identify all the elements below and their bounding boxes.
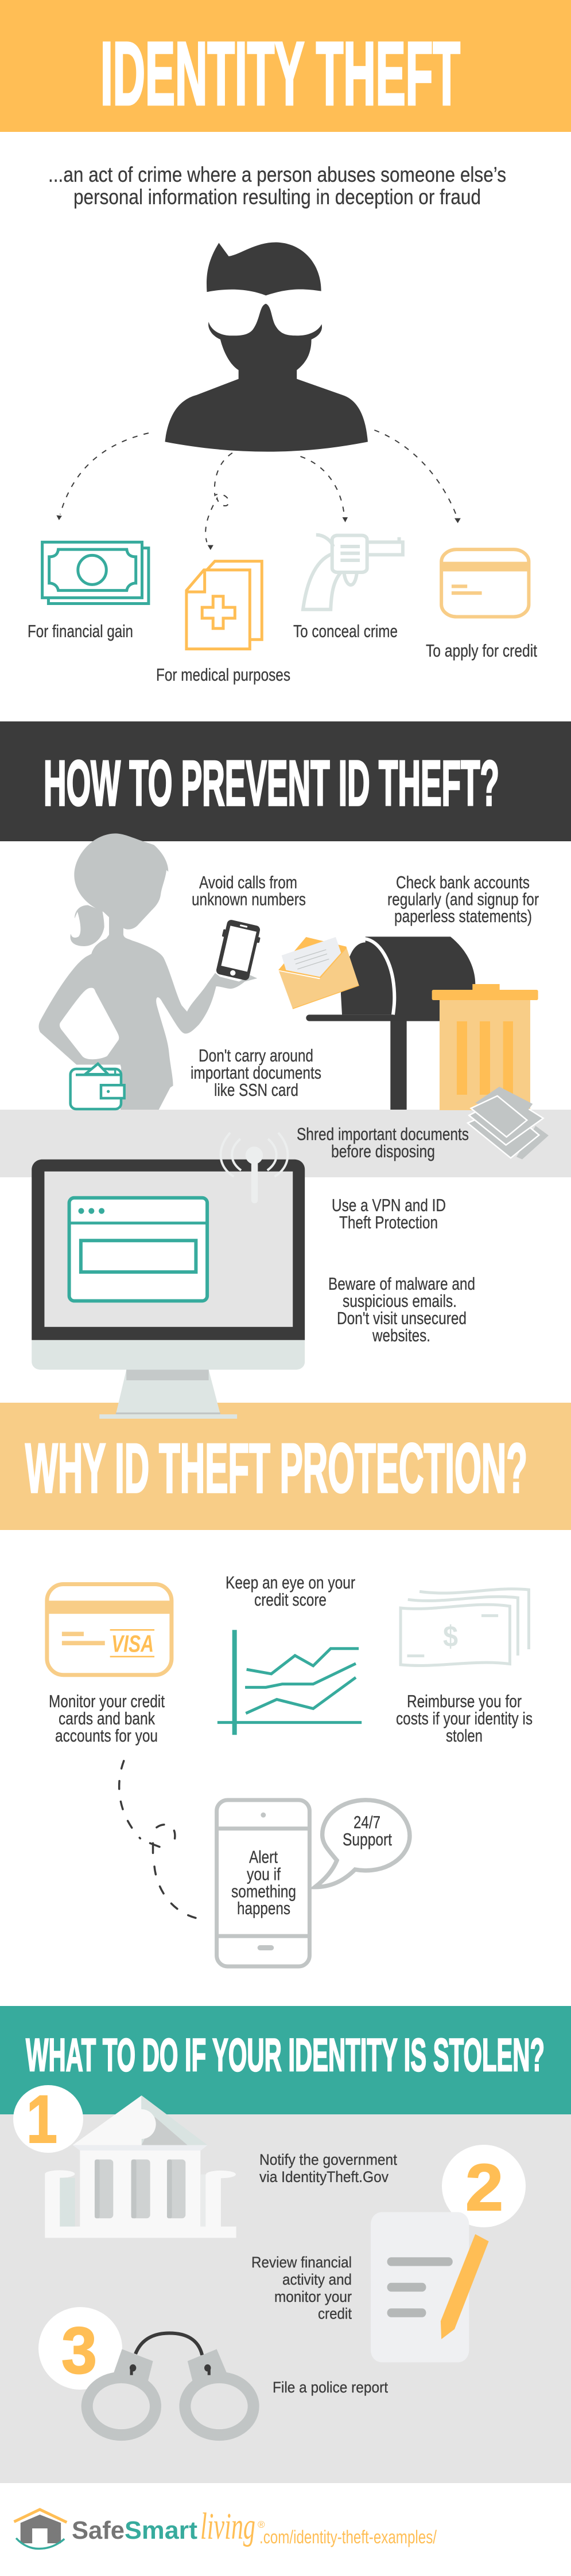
stolen identity steps text: activity and [282, 2271, 352, 2288]
intro text: ...an act of crime where a person abuses someone else’s [48, 163, 506, 186]
protection benefits text: Keep an eye on your [226, 1572, 355, 1593]
footer logo: .com/identity-theft-examples/ [259, 2527, 437, 2547]
icon: masked thief silhouette [165, 242, 368, 452]
stolen identity steps text: Notify the government [259, 2151, 397, 2168]
band: how to prevent [0, 721, 571, 841]
prevention tips text: Don't carry around [199, 1045, 313, 1065]
motive labels: To conceal crime [293, 621, 398, 641]
icon: cash bills: $ [443, 1620, 458, 1653]
icon: speech bubble [315, 1800, 410, 1887]
icon: medical documents [187, 561, 262, 649]
stolen identity steps text: File a police report [273, 2379, 388, 2396]
prevention tips text: paperless statements) [394, 906, 532, 926]
steps panel background [0, 2114, 571, 2483]
prevention tips text: Check bank accounts [396, 872, 530, 892]
icon: trash can [432, 984, 538, 1110]
motive labels: For financial gain [28, 621, 133, 641]
intro text: personal information resulting in deception or fraud [73, 185, 481, 209]
icon: visa card [47, 1584, 172, 1675]
protection benefits text: something [231, 1881, 296, 1902]
prevention tips text: important documents [191, 1063, 321, 1083]
prevention tips text: suspicious emails. [343, 1291, 457, 1311]
step 2 badge [442, 2145, 526, 2227]
prevention tips text: unknown numbers [192, 889, 306, 910]
icon: credit card [441, 549, 529, 617]
motive labels: For medical purposes [156, 665, 290, 685]
icon: house logo [14, 2509, 67, 2548]
icon: handcuffs [87, 2333, 254, 2435]
footer logo: Smart [125, 2516, 197, 2544]
shred band [0, 1110, 571, 1177]
prevention tips text: Avoid calls from [199, 872, 297, 892]
icon: browser window [69, 1198, 207, 1301]
chart: credit score lines [217, 1630, 362, 1735]
protection benefits text [49, 1572, 533, 1918]
stolen identity steps text: via IdentityTheft.Gov [259, 2168, 389, 2185]
step 1 badge [13, 2082, 83, 2157]
figure: woman silhouette [38, 833, 257, 1110]
prevention tips text: Beware of malware and [328, 1274, 475, 1294]
step 1 badge: 1 [26, 2082, 57, 2157]
icon: government building [45, 2095, 236, 2238]
protection benefits text: you if [247, 1864, 281, 1884]
prevention tips text: websites. [372, 1325, 430, 1345]
arrows from thief to motives [56, 430, 461, 550]
icon: wallet [71, 1064, 125, 1109]
icon: shredded paper stack [468, 1087, 549, 1160]
protection benefits text: 24/7 [354, 1812, 380, 1832]
protection benefits text: cards and bank [59, 1708, 155, 1728]
protection benefits text: credit score [254, 1590, 327, 1610]
icon: mailbox [306, 936, 475, 1110]
protection benefits text: Alert [249, 1847, 278, 1867]
prevention tips text [191, 872, 539, 1345]
footer logo: living [200, 2505, 255, 2547]
prevention tips text: like SSN card [214, 1080, 298, 1100]
step 2 badge: 2 [465, 2151, 503, 2224]
stolen identity steps text: monitor your [274, 2288, 352, 2305]
icon: phone in hand [213, 919, 263, 981]
prevention tips text: Don't visit unsecured [337, 1308, 467, 1328]
prevention tips text: before disposing [331, 1141, 435, 1161]
step 3 badge: 3 [61, 2314, 97, 2387]
motive labels [28, 621, 537, 685]
motive labels: To apply for credit [426, 641, 537, 661]
protection benefits text: Monitor your credit [49, 1691, 165, 1711]
icon: wifi antenna [220, 1133, 288, 1203]
dashed arrow to phone [119, 1761, 204, 1919]
icon: desktop monitor [32, 1133, 305, 1419]
prevention tips text: Use a VPN and ID [332, 1195, 446, 1215]
footer logo: ® [258, 2519, 265, 2530]
icon: envelope with letter [278, 937, 359, 1009]
stolen identity steps text [251, 2151, 397, 2396]
prevention tips text: Shred important documents [297, 1124, 469, 1144]
icon: visa card: VISA [111, 1630, 154, 1657]
header band [0, 0, 571, 132]
intro text [48, 163, 506, 209]
protection benefits text: happens [237, 1898, 290, 1918]
protection benefits text: accounts for you [55, 1726, 158, 1746]
icon: smartphone alert [217, 1800, 309, 1966]
stolen identity steps text: credit [318, 2305, 352, 2323]
footer logo: Safe [72, 2516, 125, 2544]
protection benefits text: costs if your identity is [396, 1708, 533, 1728]
protection benefits text: Support [343, 1829, 392, 1849]
protection benefits text: Reimburse you for [407, 1691, 522, 1711]
icon: cash bills [401, 1589, 529, 1665]
band: why protection background [0, 1403, 571, 1530]
stolen identity steps text: Review financial [251, 2254, 352, 2271]
icon: document and pencil [371, 2212, 489, 2362]
prevention tips text: Theft Protection [339, 1212, 438, 1232]
icon: money stack [42, 542, 149, 604]
step 3 badge [38, 2307, 122, 2390]
protection benefits text: stolen [446, 1726, 483, 1746]
footer logo [14, 2505, 437, 2548]
icon: revolver [303, 535, 403, 610]
band: what to do [0, 2006, 571, 2114]
